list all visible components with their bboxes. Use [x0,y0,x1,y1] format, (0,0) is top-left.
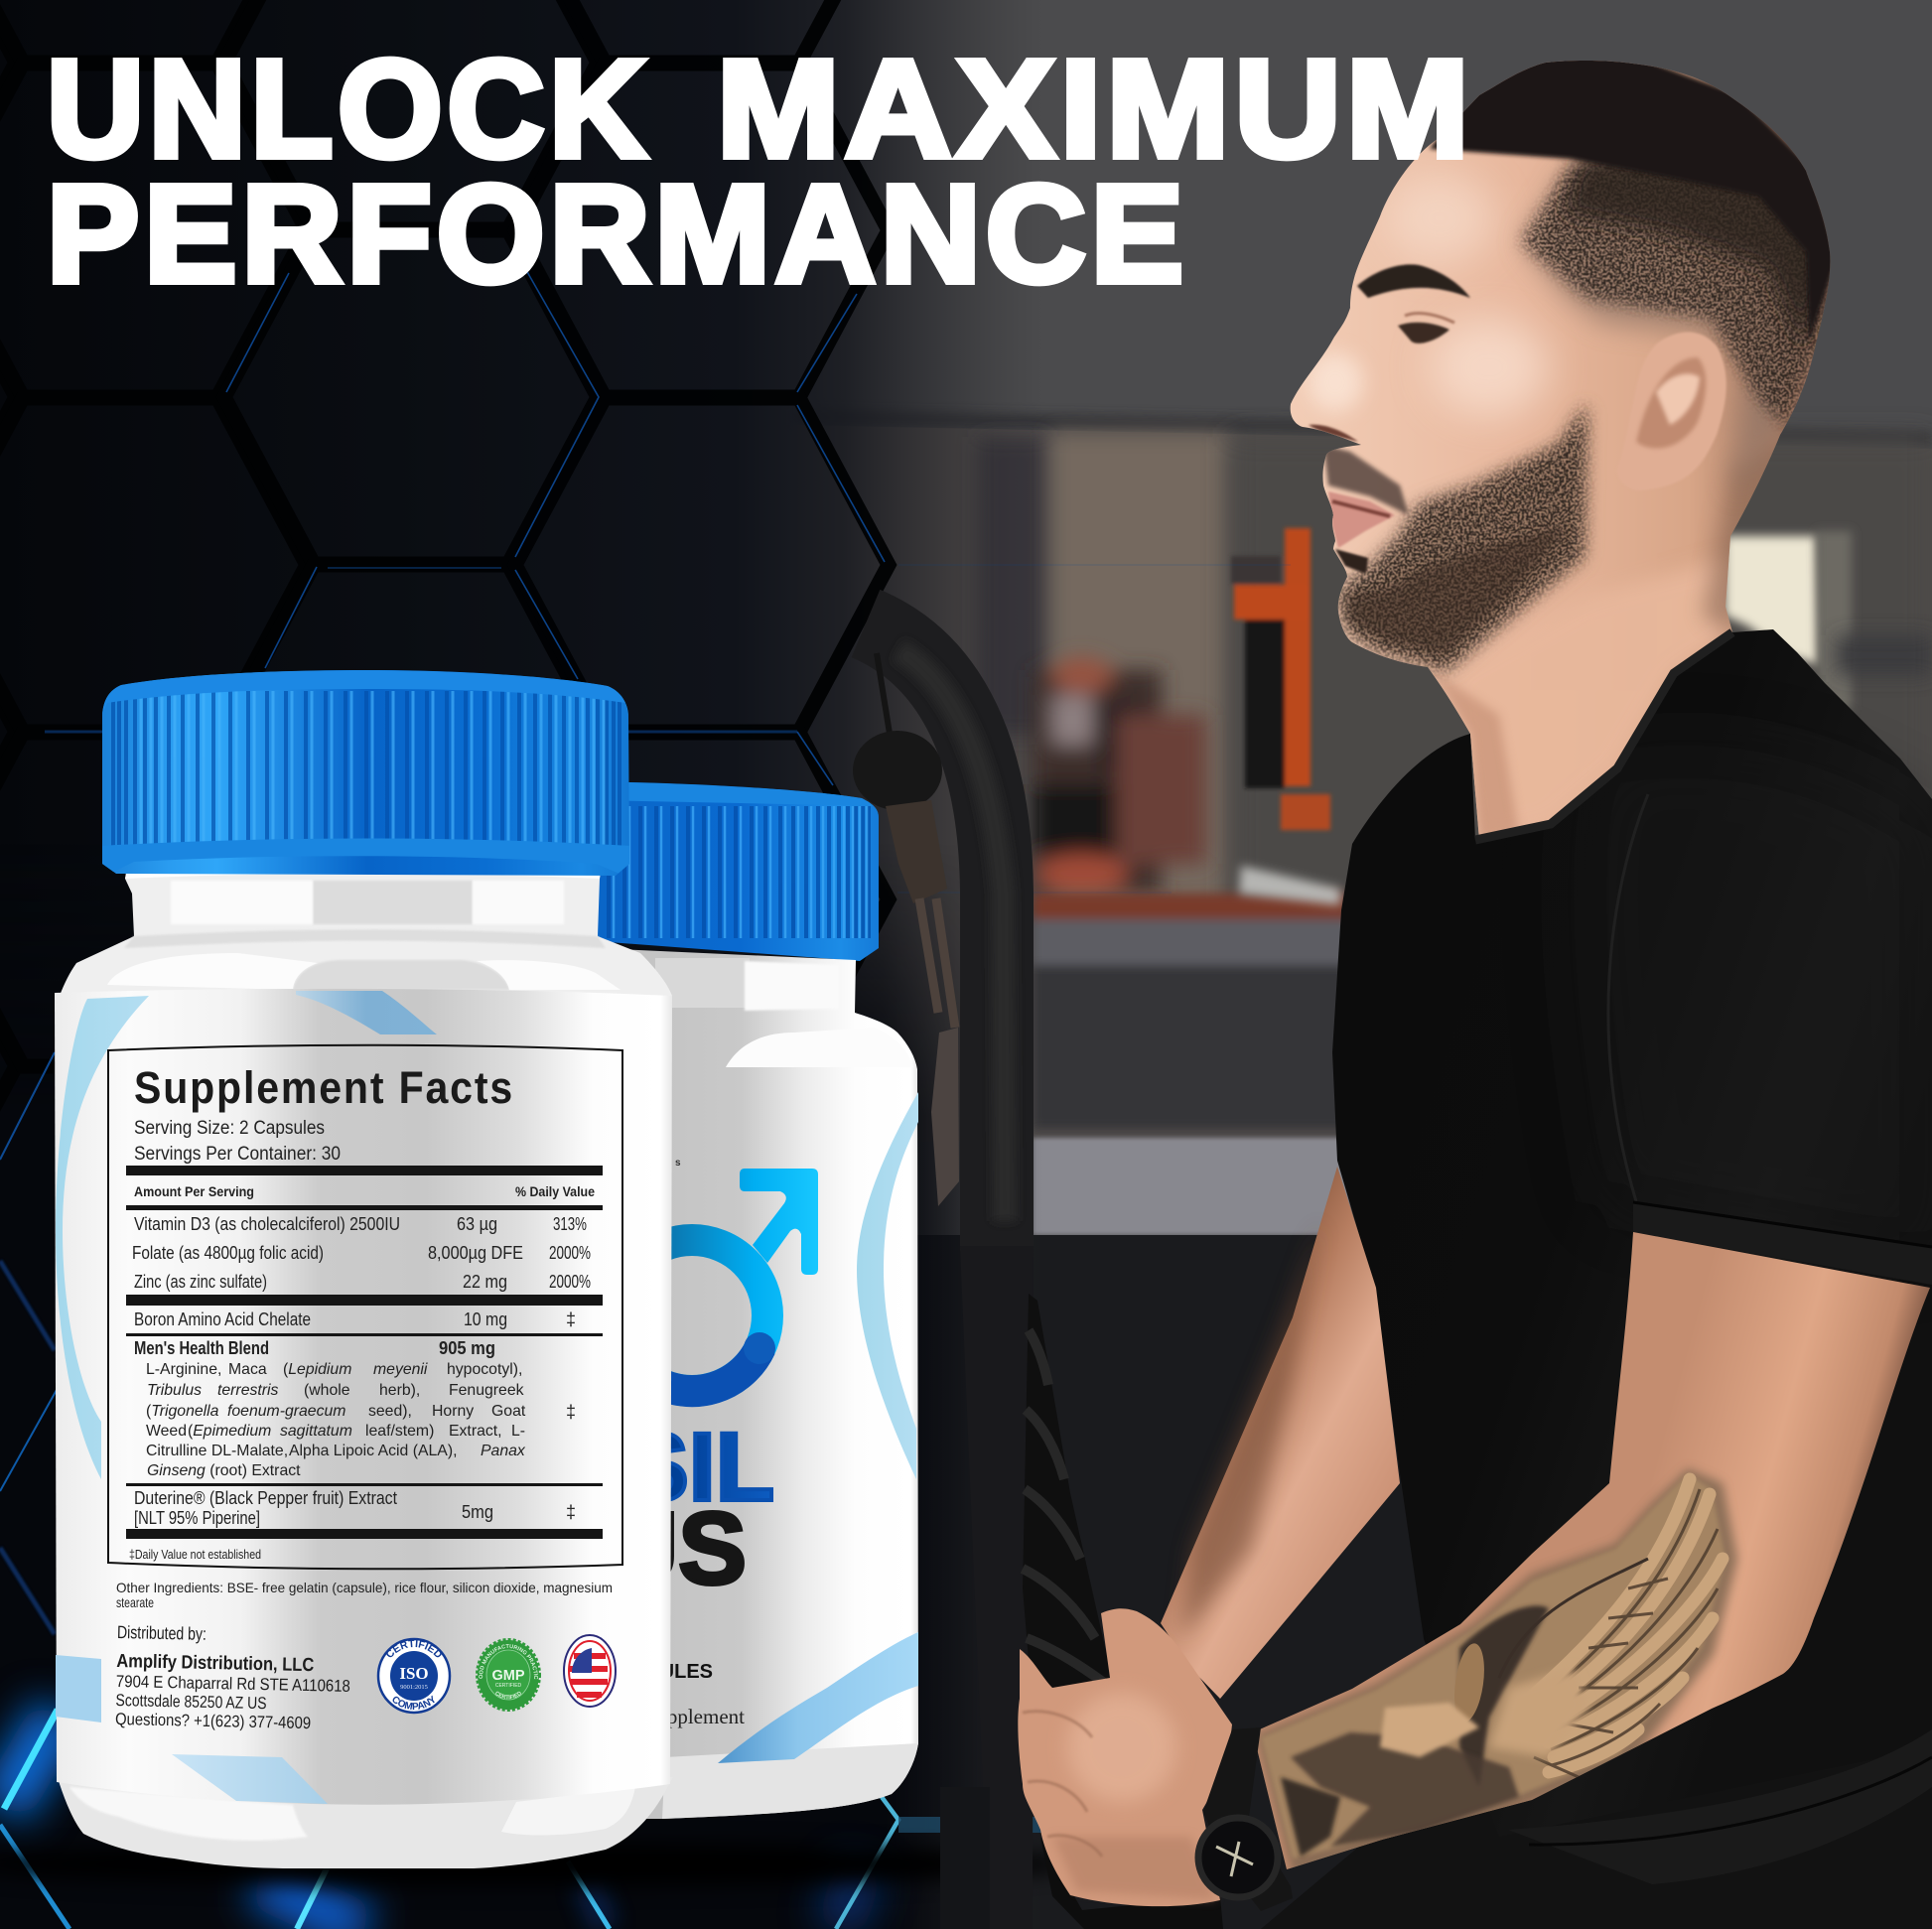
blend ingredient paragraph: ( [188,1423,194,1440]
ring lower dark [654,1347,760,1391]
blend ingredient paragraph: leaf/stem) [365,1423,434,1440]
top hair [1430,56,1837,343]
front bottle cap [99,667,635,881]
zinc percent: 2000% [549,1272,591,1292]
title word UNLOCK: UNLOCK [47,32,651,187]
flag stripes [570,1656,608,1695]
blend ingredient paragraph: Horny [432,1403,474,1420]
blend ingredient paragraph [146,1361,526,1479]
duterine amount: 5mg [462,1502,493,1522]
row: folate [132,1243,591,1263]
shirt sleeve highlight [1574,745,1932,1261]
dark body [1291,1732,1519,1847]
blend dagger: ‡ [566,1402,576,1422]
dark gym floor [794,1235,1932,1929]
lower pole [960,1246,1034,1929]
light plumage [1489,1668,1588,1757]
ISO mark: ISO [399,1664,429,1683]
title line two: PERFORMANCE [47,157,1188,312]
arrow [740,1169,818,1275]
blend ingredient paragraph: Epimedium [193,1423,271,1440]
row: vitamin D3 [134,1214,587,1234]
heading: Supplement Facts: Supplement Facts [134,1062,514,1113]
facts box border [108,1045,622,1569]
shoulder center gray [293,960,509,990]
hem seam [1633,1202,1932,1247]
tattoo base [1261,1473,1725,1859]
beard stubble [1338,404,1587,670]
far arm hair shade [1181,1221,1320,1638]
blend ingredient paragraph: Trigonella [151,1403,219,1420]
wall beam [794,409,1932,449]
light floor band [1033,1138,1350,1235]
rule [126,1205,603,1210]
row: men's health blend [134,1338,495,1358]
cap 2 rib shine [614,806,867,938]
boron amount: 10 mg [464,1309,507,1329]
red equipment cluster [1033,657,1206,894]
row: boron [134,1309,576,1329]
dark tattoo shading [1459,1605,1549,1787]
pants [1261,1759,1932,1929]
blend ingredient paragraph: terrestris [217,1382,279,1399]
waistband ribs [1529,1757,1932,1845]
hand [1018,1608,1232,1906]
neck ring [125,858,602,879]
GMP bottom arc text: CERTIFIED [495,1692,521,1700]
blend ingredient paragraph: Alpha Lipoic Acid (ALA), [289,1443,457,1459]
daily value header: % Daily Value [515,1183,595,1199]
folate amount: 8,000µg DFE [428,1243,523,1263]
tattoo soft shadow [1256,1468,1737,1876]
black ball [853,731,942,810]
pole highlight [898,650,1005,1221]
back right arc [857,1092,918,1479]
blend ingredient paragraph: foenum-graecum [227,1403,345,1420]
ISO number: 9001:2015 [400,1684,428,1691]
other ingredients [116,1580,613,1610]
far arm [1161,1167,1400,1699]
beard soft tone [1338,404,1587,670]
blend ingredient paragraph: L-Arginine, [146,1361,221,1378]
sleeve hem [1633,1202,1932,1285]
rule [126,1333,603,1336]
back bottle base shade [662,1743,918,1819]
shadow under bottles [0,1843,1072,1886]
blend ingredient paragraph: ( [146,1403,152,1420]
blend ingredient paragraph: herb), [379,1382,420,1399]
hook bracket [886,800,947,903]
blend ingredient paragraph: Tribulus [147,1382,202,1399]
forehead highlight [1385,174,1494,263]
darker fade upper [1564,129,1832,347]
lower wide pole band [940,1787,990,1929]
brand wordmark fragment: SIL [624,1413,774,1521]
badge: USA flag [564,1635,616,1707]
ISO top arc text: CERTIFIED [387,1640,441,1658]
back neck highlight [745,961,839,1011]
blend ingredient paragraph: L- [511,1423,525,1440]
GMP small text: CERTIFIED [495,1683,522,1689]
window frame [1817,531,1852,710]
wing feathers light [1519,1479,1723,1772]
handle strap [1040,1837,1223,1929]
lower left blue lines [0,1052,62,1634]
panel: supplement facts [108,1045,622,1569]
left arc swoosh [56,996,149,1479]
rule [126,1295,603,1306]
top swoosh [296,991,437,1034]
zinc amount: 22 mg [463,1272,507,1292]
lower wall [794,425,1932,1142]
blend ingredient paragraph: Ginseng [147,1462,206,1479]
product bottle: back, front label [55,670,918,1868]
blend ingredient paragraph: (root) Extract [206,1462,301,1479]
cap 2 grooves [609,806,869,938]
wrist dark [1281,1777,1340,1857]
cap 2 top rim [596,782,879,818]
wing bone line [1499,1559,1648,1678]
other ingredients line two: stearate [116,1594,154,1610]
thin rod [877,653,891,740]
lower blue patch [172,1754,328,1804]
row: boron: Boron Amino Acid Chelate [134,1309,311,1329]
GMP mark: GMP [491,1668,525,1684]
hand shadow [1052,1837,1216,1900]
cap 2 fill [596,779,884,968]
row: duterine: Duterine® (Black Pepper fruit) Extract [134,1488,397,1508]
watch hands [1216,1842,1253,1876]
vitamin D3 amount: 63 µg [457,1214,497,1234]
serving size: Serving Size: 2 Capsules [134,1118,325,1139]
near arm [1253,1232,1930,1869]
glowing blue floor lines [0,1710,1042,1929]
blend ingredient paragraph: Citrulline DL-Malate, [146,1443,288,1459]
blend ingredient paragraph: Fenugreek [449,1382,524,1399]
blend ingredient paragraph: Maca [228,1361,267,1378]
ring [617,1240,767,1391]
blend amount: 905 mg [439,1338,495,1358]
wing feather dark lines [1524,1489,1718,1777]
ISO center [390,1651,438,1701]
dietary supplement line: Dietary Supplement [577,1705,745,1728]
hair fade soft tone [1522,129,1832,496]
GMP top arc text: GOOD MANUFACTURING PRACTICE [479,1644,538,1680]
row: men's health blend: Men's Health Blend [134,1338,269,1358]
equipment at right [1837,635,1932,675]
title [47,32,1474,312]
city: Scottsdale 85250 AZ US [115,1691,267,1713]
company name: Amplify Distribution, LLC [116,1651,315,1676]
chain links [919,898,955,1028]
eyelid [1405,314,1454,323]
title word MAXIMUM: MAXIMUM [717,32,1474,187]
nose highlight [1308,352,1363,412]
vitamin D3 percent: 313% [553,1214,587,1234]
shoulder shade band [124,929,606,948]
lips [1328,491,1395,548]
front neck [60,862,672,996]
orange rack [1231,528,1330,830]
blend ingredient paragraph: meyenii [373,1361,428,1378]
back bottle body [596,948,918,1819]
cap grooves [113,691,620,846]
thin blue hexagon highlights [45,263,1291,893]
amount per serving header: Amount Per Serving [134,1183,254,1199]
flag red ring [569,1641,611,1701]
curved black pole [866,623,997,1251]
sleeve seam [1608,794,1648,1201]
head of figure [1450,1641,1488,1724]
blend ingredient paragraph: Weed [146,1423,187,1440]
lower left darkness [475,903,963,1929]
chain hook [931,1028,959,1206]
neck right highlight [473,881,564,924]
head and neck skin [1291,61,1830,840]
row: folate: Folate (as 4800µg folic acid) [132,1243,324,1263]
rope machine: pole, ball and chain [853,623,1034,1929]
blend ingredient paragraph: Goat [491,1403,526,1420]
nostril [1309,425,1358,442]
moustache [1323,445,1409,515]
waistband [1879,1729,1932,1758]
servings per container: Servings Per Container: 30 [134,1144,341,1165]
badge: ISO certified [377,1638,451,1714]
soul patch [1335,549,1368,574]
row: duterine [134,1488,576,1528]
blend ingredient paragraph: hypocotyl), [447,1361,522,1378]
back bottle cap [596,779,884,968]
neck shadow [1434,673,1521,834]
hexagon pattern [0,0,889,1233]
blend ingredient paragraph: ( [283,1361,289,1378]
ring dark cap [744,1332,775,1364]
row: vitamin D3: Vitamin D3 (as cholecalciferol) 2500IU [134,1214,400,1234]
cap top rim [102,670,628,717]
cheek highlight [1430,318,1549,417]
watch strap [1203,1727,1293,1911]
row: zinc: Zinc (as zinc sulfate) [134,1272,267,1292]
capsule count: CAPSULES [605,1661,713,1683]
folate percent: 2000% [549,1243,591,1263]
dark wall column [978,437,1047,735]
lower tan [1380,1703,1479,1757]
finger creases [1023,1712,1102,1857]
background: blurred gym photo [475,0,1932,1929]
rule [126,1483,603,1486]
base right shine [501,1787,635,1835]
rule [126,1166,603,1175]
back of neck shadow [1703,437,1787,635]
knuckle highlight [1067,1693,1176,1802]
face shading and hair [1308,56,1837,840]
cap fill [99,667,635,881]
cap lower rim [99,838,631,879]
street address: 7904 E Chaparral Rd STE A110618 [116,1672,350,1696]
blend ingredient paragraph: (whole [304,1382,350,1399]
man: gym athlete [1018,56,1932,1929]
GMP inner ring [486,1650,530,1700]
blend ingredient paragraph: Lepidium [288,1361,351,1378]
blend ingredient paragraph: sagittatum [280,1423,352,1440]
tattoo: winged figure [1256,1468,1737,1876]
ear [1617,332,1726,490]
back neck gray [655,958,750,1008]
footnote: ‡Daily Value not established [129,1548,261,1562]
badge: GMP certified [476,1638,541,1712]
rope [1023,1294,1112,1708]
shoulder white highlights [107,953,318,990]
blend ingredient paragraph: seed), [368,1403,412,1420]
neck gray band [313,881,473,924]
rule [126,1529,603,1539]
other ingredients: Other Ingredients: BSE- free gelatin (capsule), rice flour, silicon dioxide, magnesium [116,1580,613,1595]
blend ingredient paragraph: Panax [481,1443,526,1459]
eye [1398,323,1449,344]
lower gym bench bands [1033,894,1350,1129]
distributor block: Distributed by: [117,1622,207,1644]
shoulder right highlight [477,960,621,990]
blend ingredient paragraph: Extract, [449,1423,502,1440]
left patch [56,1655,101,1722]
base left shine [69,1787,308,1841]
dumbbell highlight [1239,866,1340,905]
window [1725,536,1821,665]
t-shirt body [1332,629,1932,1837]
mouth line [1332,501,1390,516]
front bottle body [55,989,672,1805]
plus wordmark fragment: US [605,1491,747,1605]
collar binding [1475,632,1732,840]
ISO bottom arc text: COMPANY [393,1696,435,1710]
eyebrow [1357,264,1470,298]
distributor block [115,1622,351,1733]
back bottom swoosh [718,1632,918,1763]
rope strands [1023,1330,1104,1683]
ear highlight [1656,373,1700,425]
row: zinc [134,1272,591,1292]
neck highlight [171,881,313,924]
front bottle base [58,1777,673,1868]
lower wall tint [1231,437,1932,1072]
duterine line two: [NLT 95% Piperine] [134,1508,260,1528]
inner ear [1636,357,1706,449]
neck tone [1449,556,1732,840]
phone: Questions? +1(623) 377-4609 [115,1710,311,1732]
duterine dagger: ‡ [566,1502,576,1522]
hair fade stubble [1522,129,1832,427]
back shoulder highlight [726,1028,913,1067]
gender symbol logo [617,1169,818,1391]
beard dark core [1348,526,1569,655]
fragment s: s [675,1158,681,1169]
watch face [1198,1818,1278,1897]
light wall column [1050,433,1229,909]
boron dagger: ‡ [566,1309,576,1329]
cap rib shine [141,691,604,846]
flag canton [572,1648,592,1673]
